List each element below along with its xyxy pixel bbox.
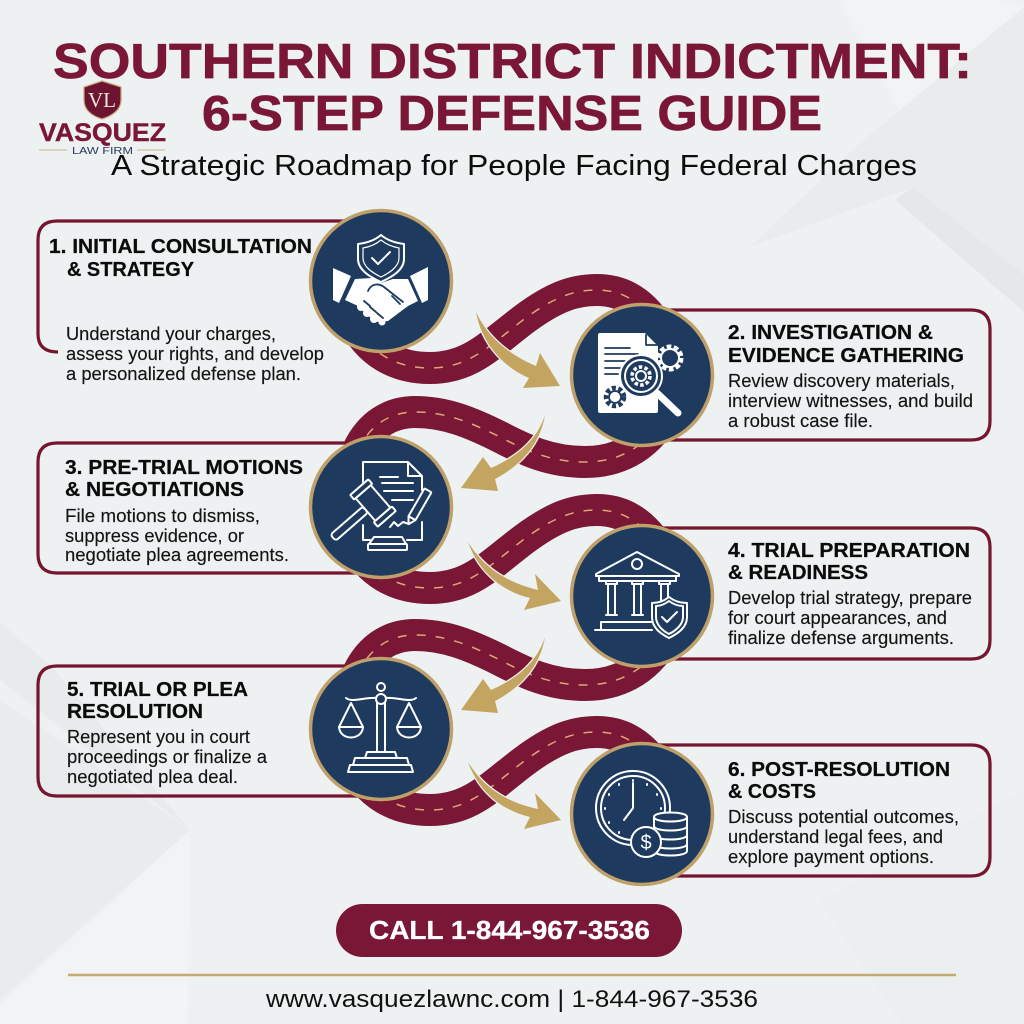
logo: Vasquez Law Firm: VASQUEZ <box>39 119 166 147</box>
logo: Vasquez Law Firm: VL <box>88 88 116 112</box>
heading: step 3 <box>65 456 303 501</box>
icon: clock and coins: $ <box>640 832 652 854</box>
heading: step 4 <box>728 539 970 584</box>
title <box>53 35 972 141</box>
road: step 5 to 6 <box>355 732 660 810</box>
subtitle: A Strategic Roadmap for People Facing Federal Charges <box>111 150 917 182</box>
panel: step 6 <box>642 745 990 876</box>
panel: step 3 <box>38 443 381 573</box>
heading: step 1 <box>49 235 312 281</box>
arrow: step 3 to 4 <box>468 542 561 610</box>
panel: step 5 <box>38 666 381 796</box>
arrow: step 1 to 2 <box>476 312 560 388</box>
icon: handshake and shield <box>310 210 452 352</box>
logo: Vasquez Law Firm <box>39 81 166 157</box>
text: step 3 description: suppress evidence, or <box>65 526 244 546</box>
road: step 4 to 5 <box>358 635 665 685</box>
road: step 3 to 4 <box>355 510 660 588</box>
text: step 6 description <box>728 807 959 867</box>
call to action button <box>336 904 682 957</box>
text: step 1 description: Understand your charges, <box>66 324 276 344</box>
arrow: step 4 to 5 <box>461 637 545 713</box>
heading: step 5: RESOLUTION <box>67 700 203 723</box>
footer contact line: www.vasquezlawnc.com | 1-844-967-3536 <box>265 986 758 1013</box>
text: step 1 description <box>66 324 324 384</box>
heading: step 1: & STRATEGY <box>67 258 194 281</box>
text: step 1 description: assess your rights, and develop <box>66 344 324 364</box>
text: step 3 description <box>65 506 289 565</box>
text: step 6 description: Discuss potential outcomes, <box>728 807 959 827</box>
heading: step 6: 6. POST-RESOLUTION <box>728 758 950 781</box>
heading: step 6 <box>728 758 950 803</box>
text: step 5 description <box>67 727 268 787</box>
text: step 5 description: Represent you in court <box>67 727 250 747</box>
text: step 4 description: for court appearances, and <box>728 608 947 628</box>
heading: step 1: 1. INITIAL CONSULTATION <box>49 235 312 258</box>
heading: step 4: & READINESS <box>728 561 868 584</box>
icon: document and magnifier <box>572 304 712 446</box>
logo: Vasquez Law Firm: LAW FIRM <box>72 145 133 157</box>
panel: step 1 <box>38 221 362 384</box>
icon: clock and coins <box>572 744 712 884</box>
panel: step 4 <box>642 528 990 659</box>
heading: step 6: & COSTS <box>728 780 816 803</box>
text: step 2 description: interview witnesses, and build <box>728 391 973 411</box>
text: step 3 description: File motions to dismiss, <box>65 506 260 526</box>
heading: step 5: 5. TRIAL OR PLEA <box>67 678 248 701</box>
icon: gavel and document <box>310 436 452 578</box>
text: step 6 description: explore payment options. <box>728 847 934 867</box>
title: 6-STEP DEFENSE GUIDE <box>202 87 822 141</box>
text: step 4 description <box>728 588 972 648</box>
title: SOUTHERN DISTRICT INDICTMENT: <box>53 35 972 89</box>
icon: courthouse and shield <box>572 526 712 666</box>
text: step 2 description: Review discovery materials, <box>728 371 955 391</box>
panel: step 2 <box>642 310 990 440</box>
arrow: step 5 to 6 <box>468 762 561 829</box>
text: step 2 description: a robust case file. <box>728 411 873 431</box>
heading: step 3: & NEGOTIATIONS <box>65 478 244 501</box>
heading: step 2: EVIDENCE GATHERING <box>728 344 964 367</box>
heading: step 4: 4. TRIAL PREPARATION <box>728 539 970 562</box>
text: step 2 description <box>728 371 973 431</box>
text: step 5 description: negotiated plea deal. <box>67 767 238 787</box>
text: step 3 description: negotiate plea agreements. <box>65 545 289 565</box>
road: step 1 to 2 <box>355 290 660 368</box>
arrow: step 2 to 3 <box>461 415 545 491</box>
heading: step 2 <box>728 321 964 367</box>
text: step 4 description: Develop trial strategy, prepare <box>728 588 972 608</box>
heading: step 2: 2. INVESTIGATION & <box>728 321 933 344</box>
heading: step 3: 3. PRE-TRIAL MOTIONS <box>65 456 303 479</box>
icon: scales of justice <box>310 658 452 800</box>
text: step 6 description: understand legal fees, and <box>728 827 943 847</box>
heading: step 5 <box>67 678 248 723</box>
text: step 1 description: a personalized defense plan. <box>66 364 301 384</box>
call to action button: CALL 1-844-967-3536 <box>369 915 650 945</box>
text: step 5 description: proceedings or finalize a <box>67 747 268 767</box>
text: step 4 description: finalize defense arguments. <box>728 628 954 648</box>
road: step 2 to 3 <box>358 412 665 462</box>
